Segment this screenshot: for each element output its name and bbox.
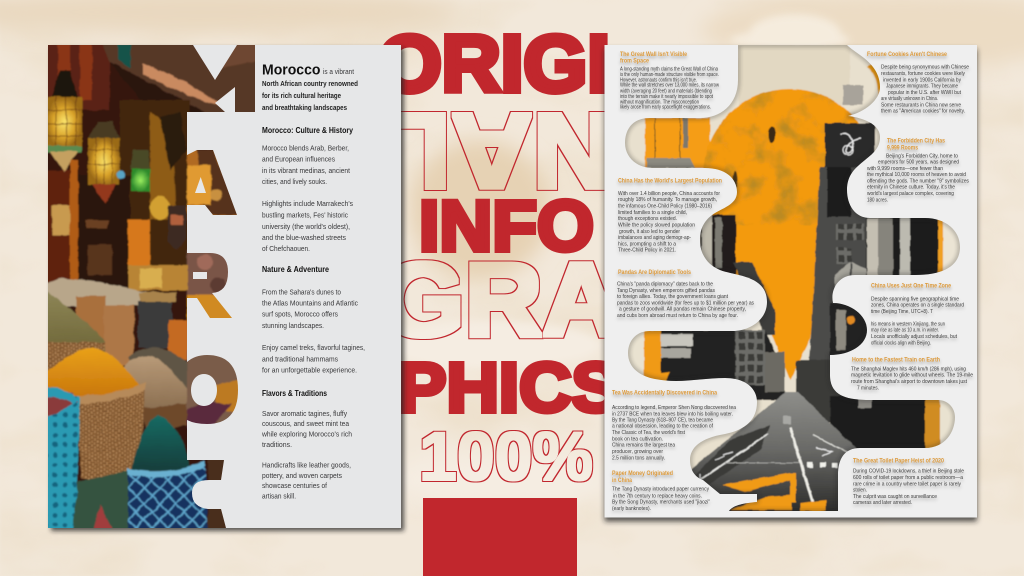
text: flavors and traditions: artisan skill. xyxy=(262,492,296,501)
text: flavors and traditions: traditions. xyxy=(262,440,292,449)
card: tea: 2.5 million tons annually. xyxy=(612,455,665,461)
text: culture and history: of Chefchaouen. xyxy=(262,244,310,253)
text: culture and history: bustling markets, Fes' historic xyxy=(262,211,348,220)
card: one time zone: may rise as late as 10 a.m. in winter. xyxy=(871,328,939,334)
card: Great Wall: into the terrain make it nearly impossible to spot xyxy=(620,94,714,100)
card: Great Wall: from Space xyxy=(620,59,650,65)
card: pandas: Pandas Are Diplomatic Tools xyxy=(618,270,692,276)
card: largest population: China Has the World's Largest Population xyxy=(618,179,722,185)
card: paper money xyxy=(612,471,710,512)
text: culture and history: university (the world's oldest), xyxy=(262,222,350,231)
text: culture and history: and European influences xyxy=(262,155,335,164)
card: fortune cookies: Japanese immigrants. They became xyxy=(886,84,958,90)
card: Forbidden City: with 9,999 rooms—one fewer than xyxy=(867,166,943,172)
photo: city street with orange sun xyxy=(625,45,960,511)
text: intro: and breathtaking landscapes xyxy=(262,103,347,112)
card: one time zone: Locals unofficially adjust schedules, but xyxy=(871,334,958,340)
text: flavors and traditions: pottery, and woven carpets xyxy=(262,471,342,480)
card: fortune cookies: them as "American cookies" for novelty. xyxy=(881,109,965,115)
card: Great Wall: is the only human-made structure visible from space. xyxy=(620,72,719,78)
text: flavors and traditions: while exploring Morocco's rich xyxy=(261,430,352,439)
text: culture and history xyxy=(262,144,353,253)
card: one time zone: his means in western Xinjiang, the sun xyxy=(871,321,945,327)
word: ORIGI: ORIGI xyxy=(378,19,610,108)
O letter content xyxy=(187,350,243,428)
card: fastest train xyxy=(851,357,973,391)
cloud xyxy=(730,14,850,54)
word: GRA outline: GRA xyxy=(381,242,620,358)
card: toilet paper heist: During COVID-19 lockdowns, a thief in Beijing stole xyxy=(853,468,964,474)
text: nature and adventure: From the Sahara's dunes to xyxy=(262,288,341,296)
card: fortune cookies: restaurants, fortune cookies were likely xyxy=(881,71,965,77)
basket: lower green xyxy=(72,470,130,528)
text: intro: North African country renowned xyxy=(262,79,358,88)
text: intro: is a vibrant xyxy=(323,67,355,76)
card: Forbidden City: The Forbidden City Has xyxy=(887,139,946,145)
card: Great Wall: likely arose from early spaceflight exaggerations. xyxy=(620,105,711,111)
text: nature and adventure: surf spots, Morocco offers xyxy=(262,310,338,319)
bag: left blue xyxy=(48,394,81,528)
card: fortune cookies xyxy=(867,52,969,115)
card: one time zone: zones, China operates on a single standard xyxy=(871,303,964,309)
lower mid hole xyxy=(830,303,868,358)
card edge inner shadow xyxy=(625,45,960,511)
text: nature and adventure: the Atlas Mountains and Atlantic xyxy=(262,299,358,308)
text: nature and adventure: and traditional hammams xyxy=(262,355,338,364)
heading: nature and adventure: Nature & Adventure xyxy=(262,264,329,274)
card: toilet paper heist: rare crime in a country where toilet paper is rarely xyxy=(853,481,961,487)
card: paper money: (early banknotes). xyxy=(612,506,651,512)
card: Forbidden City: emperors for 500 years, was designed xyxy=(878,160,959,166)
road xyxy=(690,392,860,518)
lantern: large yellow xyxy=(46,70,82,172)
mound: tan spice xyxy=(123,355,188,409)
card: toilet paper heist: stolen. xyxy=(853,488,867,494)
text: culture and history: and the blue-washed streets xyxy=(262,233,346,242)
lantern: green xyxy=(130,150,150,191)
text: flavors and traditions: couscous, and sweet mint tea xyxy=(262,419,350,428)
mound: olive spice xyxy=(48,292,106,352)
card: Forbidden City: offending the gods. The number "9" symbolizes xyxy=(867,178,969,184)
left building hole xyxy=(700,215,775,335)
text: nature and adventure: stunning landscapes. xyxy=(262,321,324,330)
card: paper money: in China xyxy=(612,478,633,484)
bag: blue pattern xyxy=(126,466,208,528)
card: fastest train: 7 minutes. xyxy=(857,385,879,391)
card: paper money: The Tang Dynasty introduced paper currency xyxy=(612,487,709,493)
card: largest population: though exceptions existed. xyxy=(618,216,677,222)
card: tea: in 2737 BCE when tea leaves blew into his boiling water. xyxy=(612,411,733,417)
card: fortune cookies: invented in early 1900s California by xyxy=(883,77,961,83)
card: tea: The Classic of Tea, the world's first xyxy=(612,430,686,436)
card: tea: a national obsession, leading to the creation of xyxy=(612,424,714,430)
red block xyxy=(423,498,577,576)
text: nature and adventure: for an unforgettable experience. xyxy=(262,366,357,375)
card: Forbidden City: the mythical 10,000 rooms of heaven to avoid xyxy=(867,172,966,178)
panel: Morocco xyxy=(40,38,401,538)
card: pandas: a gesture of goodwill. All pandas remain Chinese property, xyxy=(619,307,746,313)
card: pandas: China's "panda diplomacy" dates back to the xyxy=(617,282,713,288)
right window hole xyxy=(865,218,944,275)
word: 100% outline: 100% xyxy=(419,418,593,495)
heading: culture and history: Morocco: Culture & History xyxy=(262,125,353,135)
card: paper money: in the 7th century to replace heavy coins. xyxy=(613,494,702,500)
lantern: small xyxy=(150,196,186,250)
card: one time zone: China Uses Just One Time Zone xyxy=(871,284,952,290)
card: tea: By the Tang Dynasty (618–907 CE), tea became xyxy=(612,418,713,424)
text: intro: for its rich cultural heritage xyxy=(262,91,341,100)
card: fortune cookies: Fortune Cookies Aren't Chinese xyxy=(867,52,948,58)
card: tea: book on tea cultivation. xyxy=(612,436,663,442)
text: culture and history: cities, and lively souks. xyxy=(262,177,327,186)
card: toilet paper heist: cameras and later arrested. xyxy=(853,500,912,506)
card: fortune cookies: Some restaurants in China now serve xyxy=(881,102,961,108)
card: Great Wall: While the wall stretches over 13,000 miles, its narrow xyxy=(620,83,719,89)
card: pandas xyxy=(617,270,754,319)
text: nature and adventure xyxy=(262,288,365,375)
photo: market in MAROC letter mask xyxy=(48,45,255,528)
sun xyxy=(702,88,860,380)
text: culture and history: Highlights include Marrakech's xyxy=(262,199,353,208)
card: Great Wall xyxy=(620,52,719,111)
card: tea: According to legend, Emperor Shen Nong discovered tea xyxy=(612,405,736,411)
card: Great Wall: width (averaging 20 feet) and materials (blending xyxy=(620,89,712,95)
text: flavors and traditions: showcase centuries of xyxy=(262,481,328,490)
card: largest population xyxy=(618,179,722,254)
card: toilet paper heist xyxy=(853,458,964,506)
panel: China facts xyxy=(600,40,980,520)
card: one time zone: time (Beijing Time, UTC+8). T xyxy=(871,309,933,315)
card: Great Wall: A long-standing myth claims the Great Wall of China xyxy=(620,67,718,73)
card: Forbidden City xyxy=(867,139,969,203)
card: largest population: With over 1.4 billion people, China accounts for xyxy=(618,191,720,197)
text: culture and history: Morocco blends Arab, Berber, xyxy=(262,144,349,153)
card: tea: Tea Was Accidentally Discovered in China xyxy=(612,390,718,396)
lantern: red and gold xyxy=(88,122,125,204)
mound: turmeric xyxy=(42,348,142,398)
right street buildings xyxy=(794,360,941,448)
card: largest population: While the policy slowed population xyxy=(618,223,695,229)
panel background xyxy=(604,45,977,518)
card: Great Wall: The Great Wall Isn't Visible xyxy=(620,52,688,58)
text: flavors and traditions xyxy=(261,409,352,501)
text: flavors and traditions: Savor aromatic tagines, fluffy xyxy=(262,409,347,418)
card: toilet paper heist: The culprit was caught on surveillance xyxy=(853,494,937,500)
right tower xyxy=(808,166,868,361)
panel background xyxy=(48,45,401,528)
card: Forbidden City: eternity in Chinese culture. Today, it's the xyxy=(867,185,955,191)
card: pandas: Tang Dynasty, when emperors gifted pandas xyxy=(617,288,715,294)
orange paint splashes xyxy=(645,372,826,511)
mound: teal spice xyxy=(132,415,190,472)
text: intro: Morocco xyxy=(262,61,320,78)
heading: flavors and traditions: Flavors & Traditions xyxy=(262,388,327,398)
card: paper money: By the Song Dynasty, merchants used "jiaozi" xyxy=(612,499,710,505)
text: intro xyxy=(262,61,358,112)
card: largest population: imbalances and aging demogr-ap- xyxy=(618,235,691,241)
mound: dark brown xyxy=(128,346,188,388)
text: culture and history: in its vibrant medinas, ancient xyxy=(262,166,351,175)
word: NAL upside-down outline: NAL xyxy=(382,92,614,210)
card: one time zone xyxy=(871,284,964,346)
card: Forbidden City: world's largest palace complex, covering xyxy=(867,191,954,197)
card: Forbidden City: 180 acres. xyxy=(867,197,888,203)
card: toilet paper heist: The Great Toilet Paper Heist of 2020 xyxy=(853,458,945,464)
text: flavors and traditions: Handicrafts like leather goods, xyxy=(262,461,351,470)
text: nature and adventure: Enjoy camel treks, flavorful tagines, xyxy=(262,343,365,352)
card: fastest train: route from Shanghai's airport to downtown takes just xyxy=(851,379,968,385)
street sign on tower xyxy=(825,123,875,167)
card: Great Wall: without magnification. The misconception xyxy=(620,99,699,105)
fact cards text xyxy=(612,52,973,512)
card: fastest train: Home to the Fastest Train on Earth xyxy=(852,357,940,363)
left street buildings xyxy=(643,328,786,402)
card: pandas: pandas to zoos worldwide (for fees up to $1 million per year) as xyxy=(617,300,754,306)
card: paper money: Paper Money Originated xyxy=(612,471,673,477)
card: largest population: the infamous One-Child Policy (1980–2016) xyxy=(618,203,712,209)
card: fastest train: The Shanghai Maglev hits 460 km/h (286 mph), using xyxy=(851,367,966,373)
card: fortune cookies: popular in the U.S. after WWII but xyxy=(888,90,962,96)
word: PHICS: PHICS xyxy=(398,348,620,426)
basket: wicker xyxy=(76,384,146,480)
card: pandas: to foreign allies. Today, the government loans giant xyxy=(617,294,729,300)
card: largest population: growth, it also led to gender xyxy=(619,229,680,235)
card: pandas: and cubs born abroad must return to China by age four. xyxy=(617,313,738,319)
card: one time zone: Despite spanning five geographical time xyxy=(871,297,959,303)
spice sacks xyxy=(40,278,190,365)
word: INFO: INFO xyxy=(419,188,594,266)
card: tea: producer, growing over xyxy=(612,449,663,455)
card: toilet paper heist: 600 rolls of toilet paper from a public restroom—a xyxy=(853,475,963,481)
card: fortune cookies: are virtually unknown in China. xyxy=(881,96,938,102)
card: largest population: roughly 18% of humanity. To manage growth, xyxy=(618,197,717,203)
card: largest population: hics, prompting a shift to a xyxy=(618,242,676,248)
dark basket bits xyxy=(207,460,226,528)
title: red display lettering xyxy=(378,19,620,495)
card: Forbidden City: 9,999 Rooms xyxy=(887,145,919,151)
card: tea xyxy=(612,390,736,461)
card: Great Wall: However, astronauts confirm this isn't true. xyxy=(620,77,697,83)
card: Forbidden City: Beijing's Forbidden City, home to xyxy=(886,153,958,159)
basket: right xyxy=(142,404,188,429)
card: largest population: Three-Child Policy in 2021. xyxy=(618,248,676,254)
card: tea: China remains the largest tea xyxy=(612,443,675,449)
card: one time zone: official clocks align with Beijing. xyxy=(871,340,931,346)
card: fastest train: magnetic levitation to glide without wheels. The 19-mile xyxy=(851,373,973,379)
card: fortune cookies: Despite being synonymous with Chinese xyxy=(881,65,969,71)
card: largest population: limited families to a single child, xyxy=(618,210,687,216)
